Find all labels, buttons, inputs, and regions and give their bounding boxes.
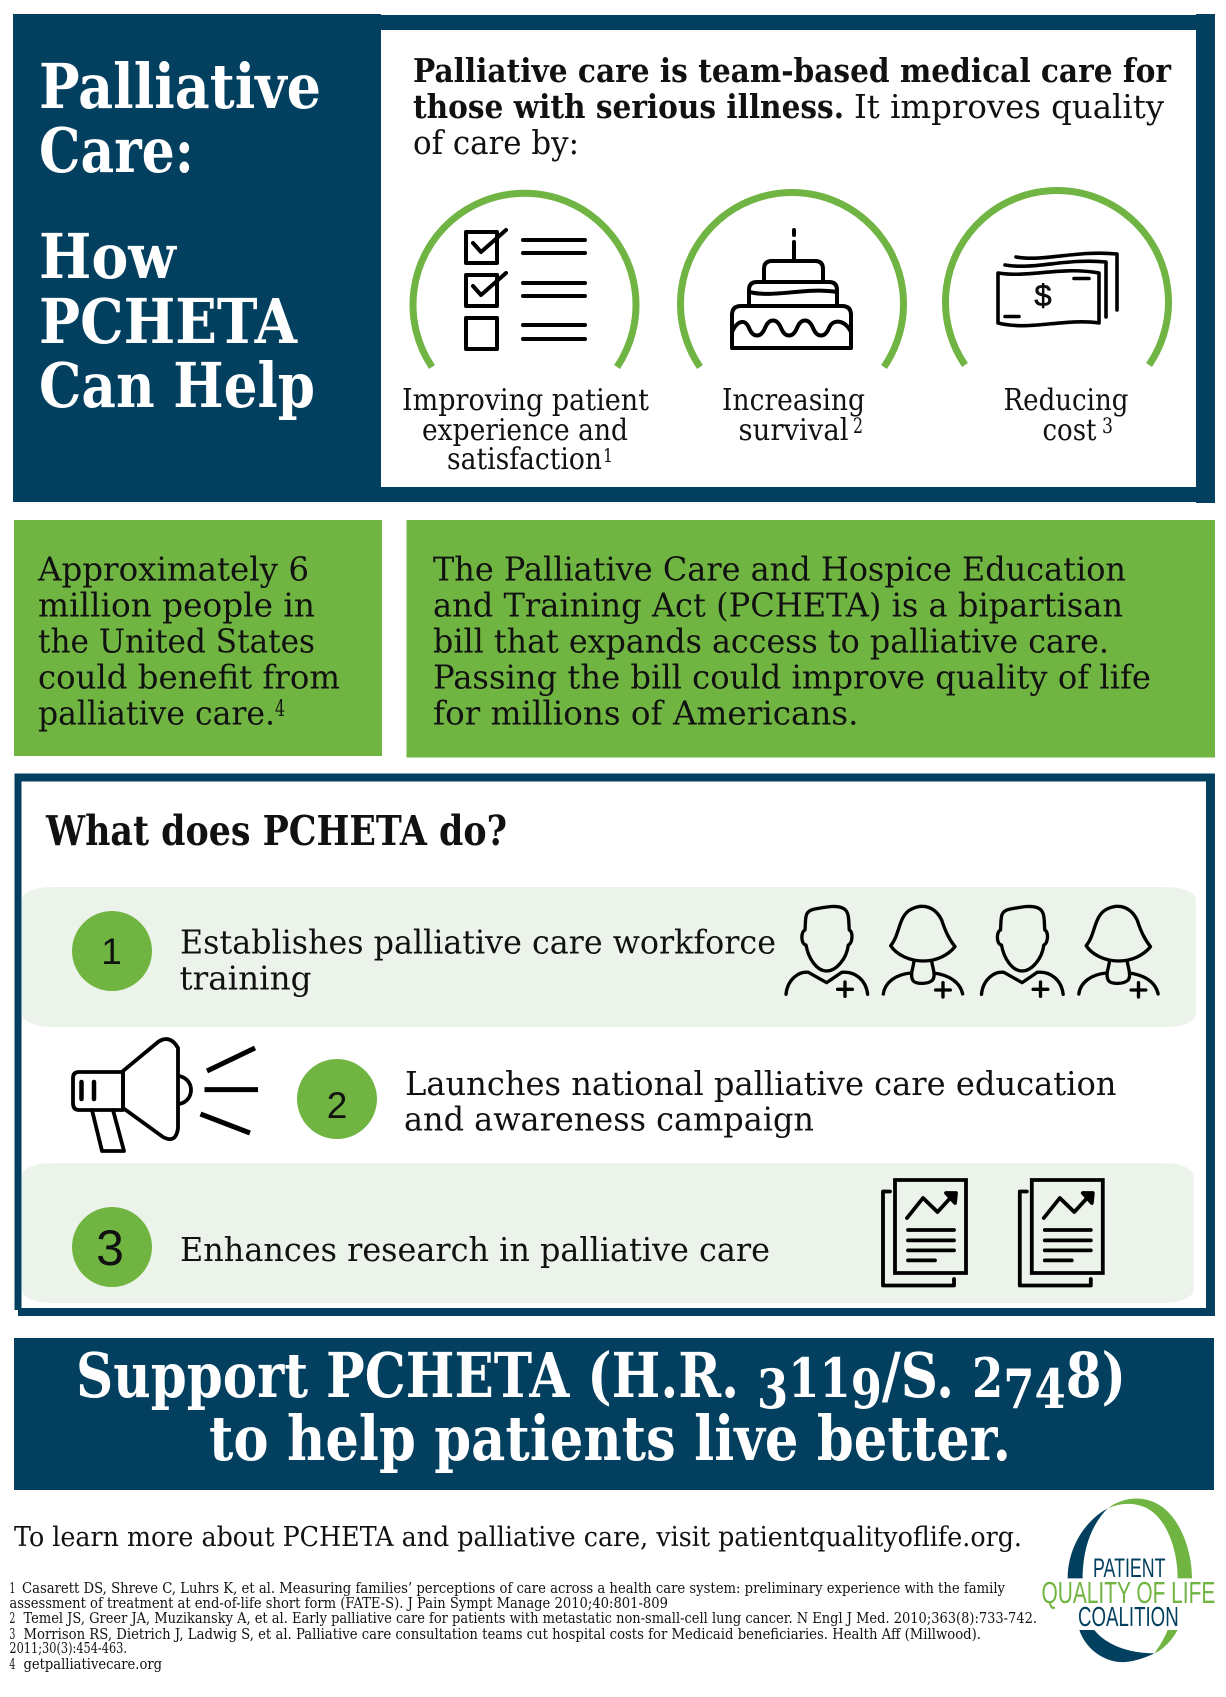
panel: six million people: Approximately 6 bbox=[37, 550, 309, 588]
text: establishes workforce training: Establishes palliative care workforce bbox=[180, 922, 776, 962]
subtitle: How PCHETA Can Help bbox=[39, 220, 315, 422]
panel: six million people bbox=[14, 520, 382, 756]
panel: what PCHETA is: bill that expands access to palliative care. bbox=[433, 622, 1109, 660]
panel: six million people: 4 bbox=[275, 697, 285, 722]
banner: call to action: Support PCHETA (H.R. bbox=[76, 1339, 874, 1412]
banner: call to action: 2 bbox=[972, 1346, 1003, 1410]
title: Palliative Care: Care: bbox=[39, 114, 194, 187]
caption: increasing survival: 2 bbox=[853, 414, 863, 438]
number badge 3 bbox=[72, 1207, 152, 1287]
number badge 1: 1 bbox=[101, 931, 122, 972]
caption: improving patient experience: experience and bbox=[422, 413, 628, 448]
icon: arc and checklist bbox=[413, 193, 636, 367]
row 1: workforce training bbox=[22, 887, 1196, 1027]
caption: increasing survival: Increasing bbox=[722, 383, 865, 418]
row 3: research bbox=[22, 1163, 1194, 1303]
icon: four health care workers bbox=[786, 906, 1158, 997]
banner: call to action: 3 bbox=[757, 1357, 788, 1421]
title: Palliative Care: Palliative bbox=[39, 50, 321, 123]
subtitle: How PCHETA Can Help: How bbox=[39, 220, 177, 293]
references: getpalliativecare.org bbox=[24, 1657, 162, 1673]
text: learn more: To learn more about PCHETA and palliative care, visit patientqualityoflife.org. bbox=[14, 1522, 1022, 1553]
panel: what PCHETA is: and Training Act (PCHETA) is a bipartisan bbox=[433, 586, 1123, 624]
caption: reducing cost: Reducing bbox=[1004, 383, 1128, 418]
references: 2 bbox=[9, 1611, 15, 1627]
panel: definition frame bbox=[381, 14, 1215, 503]
number badge 1 bbox=[72, 911, 152, 991]
panel: title block bbox=[13, 14, 381, 502]
panel: what PCHETA is: Passing the bill could improve quality of life bbox=[433, 658, 1151, 696]
banner: call to action: 8) bbox=[1066, 1339, 1126, 1412]
banner: call to action: 9 bbox=[851, 1357, 882, 1421]
number badge 2: 2 bbox=[327, 1085, 347, 1126]
banner: call to action: /S. bbox=[882, 1339, 972, 1412]
text: launches campaign bbox=[404, 1064, 1116, 1138]
caption: improving patient experience: 1 bbox=[603, 445, 613, 467]
panel: six million people: the United States bbox=[38, 622, 315, 660]
text: definition of palliative care: of care by: bbox=[413, 123, 579, 162]
text: launches campaign: Launches national palliative care education bbox=[405, 1064, 1116, 1103]
icon: arc and birthday cake bbox=[681, 193, 904, 367]
row 2: education campaign bbox=[73, 1039, 1116, 1151]
caption: increasing survival: survival bbox=[738, 413, 848, 448]
caption: increasing survival bbox=[722, 383, 865, 448]
references: Morrison RS, Dietrich J, Ladwig S, et al. Palliative care consultation teams cut hospital costs for Medicaid beneficiaries. Health Aff (Millwood). bbox=[24, 1627, 981, 1643]
heading: what does PCHETA do: What does PCHETA do? bbox=[45, 807, 507, 855]
caption: improving patient experience: satisfaction bbox=[447, 442, 602, 477]
panel: what PCHETA is: The Palliative Care and Hospice Education bbox=[433, 550, 1126, 588]
text: definition of palliative care: It improves quality bbox=[854, 87, 1164, 126]
references: Temel JS, Greer JA, Muzikansky A, et al. Early palliative care for patients with metastatic non-small-cell lung cancer. N Engl J Med. 2010;363(8):733-742. bbox=[24, 1611, 1037, 1627]
caption: reducing cost: cost bbox=[1042, 413, 1096, 448]
subtitle: How PCHETA Can Help: PCHETA bbox=[39, 285, 298, 358]
references: 4 bbox=[9, 1657, 15, 1673]
banner: call to action: 11 bbox=[788, 1346, 851, 1410]
text: enhances research: Enhances research in palliative care bbox=[180, 1230, 770, 1269]
icon: arc and money: $ bbox=[1034, 278, 1052, 313]
subtitle: How PCHETA Can Help: Can Help bbox=[39, 349, 315, 422]
panel: what does PCHETA do bbox=[14, 774, 1215, 1316]
references: Casarett DS, Shreve C, Luhrs K, et al. Measuring families’ perceptions of care across a health care system: preliminary experience with the family bbox=[22, 1581, 1006, 1597]
logo: Patient Quality of Life Coalition: PATIENT bbox=[1093, 1553, 1166, 1583]
icon: megaphone bbox=[73, 1039, 258, 1151]
banner: call to action: to help patients live better. bbox=[209, 1402, 1011, 1475]
text: establishes workforce training bbox=[180, 922, 776, 998]
caption: improving patient experience: Improving patient bbox=[402, 383, 649, 418]
logo: Patient Quality of Life Coalition: COALITION bbox=[1078, 1601, 1179, 1632]
text: definition of palliative care bbox=[413, 51, 1172, 162]
caption: reducing cost: 3 bbox=[1102, 414, 1113, 438]
number badge 2 bbox=[297, 1059, 377, 1139]
text: launches campaign: and awareness campaign bbox=[404, 1100, 814, 1138]
icon: two research reports bbox=[883, 1180, 1103, 1286]
panel: six million people: palliative care. bbox=[38, 694, 275, 732]
panel: what PCHETA is bbox=[406, 520, 1215, 758]
panel: six million people: could benefit from bbox=[38, 658, 340, 696]
text: definition of palliative care: those with serious illness. bbox=[413, 87, 844, 126]
panel: six million people: million people in bbox=[38, 586, 315, 624]
references: 1 bbox=[9, 1581, 15, 1597]
number badge 3: 3 bbox=[96, 1220, 124, 1276]
title: Palliative Care bbox=[39, 50, 321, 187]
logo: Patient Quality of Life Coalition bbox=[1042, 1499, 1215, 1662]
references bbox=[9, 1581, 1037, 1673]
icon: arc and money bbox=[946, 191, 1168, 365]
banner: call to action bbox=[14, 1338, 1214, 1490]
references: 2011;30(3):454-463. bbox=[9, 1641, 127, 1657]
references: 3 bbox=[9, 1627, 15, 1643]
banner: call to action: 74 bbox=[1003, 1357, 1066, 1421]
caption: improving patient experience bbox=[402, 383, 649, 477]
text: establishes workforce training: training bbox=[180, 958, 312, 998]
panel: what PCHETA is: for millions of Americans. bbox=[433, 694, 858, 732]
references: assessment of treatment at end-of-life short form (FATE-S). J Pain Sympt Manage 2010;40:801-809 bbox=[9, 1596, 668, 1612]
caption: reducing cost bbox=[1004, 383, 1128, 448]
